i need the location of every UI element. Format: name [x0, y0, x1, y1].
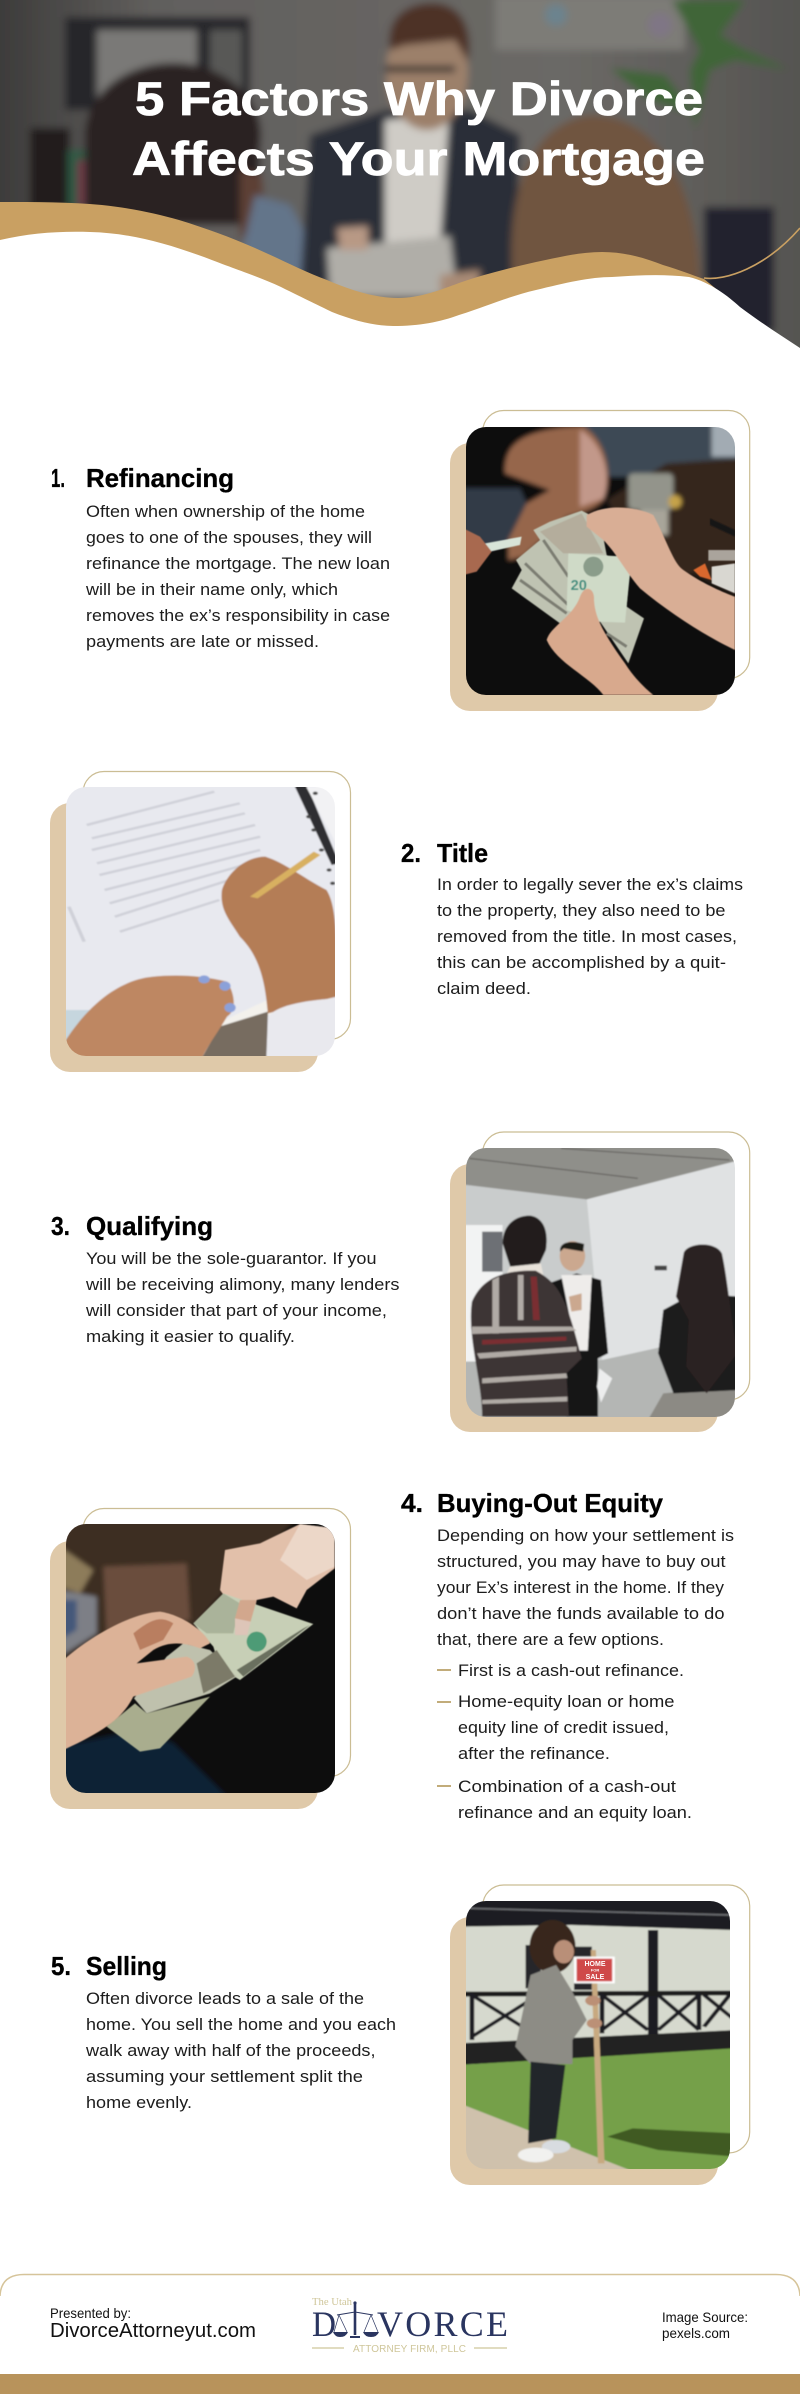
heading: 2.	[401, 838, 421, 868]
title	[132, 72, 705, 185]
bullet list: First is a cash-out refinance.	[458, 1662, 684, 1680]
footer	[0, 2274, 800, 2394]
photo: couple viewing an empty room	[459, 1143, 745, 1420]
body text: removes the ex’s responsibility in case	[86, 607, 390, 625]
photo: hands exchanging cash	[60, 1518, 343, 1802]
heading: 1.	[51, 463, 65, 493]
heading: Title	[437, 838, 488, 868]
bullet list	[437, 1662, 692, 1822]
presented by: Presented by:	[50, 2305, 131, 2321]
panel: factor 2 title	[50, 772, 743, 1072]
body text	[437, 876, 743, 998]
image source: Image Source:	[662, 2309, 748, 2325]
panel: factor 1 refinancing	[51, 410, 750, 711]
body text: don’t have the funds available to do	[437, 1605, 724, 1623]
photo: hands counting dollars	[466, 427, 735, 695]
heading: Qualifying	[86, 1211, 213, 1241]
bullet list: refinance and an equity loan.	[458, 1804, 692, 1822]
body text: claim deed.	[437, 980, 531, 998]
bullet list: Home-equity loan or home	[458, 1693, 674, 1711]
body text: structured, you may have to buy out	[437, 1553, 726, 1571]
logo: ATTORNEY FIRM, PLLC	[353, 2344, 466, 2355]
logo: VORCE	[377, 2304, 508, 2344]
body text: will consider that part of your income,	[85, 1302, 387, 1320]
body text: to the property, they also need to be	[437, 902, 726, 920]
body text: home. You sell the home and you each	[86, 2016, 396, 2034]
sign text: FOR	[591, 1968, 599, 1972]
body text: payments are late or missed.	[86, 633, 319, 651]
sign text	[584, 1961, 606, 1981]
body text	[85, 503, 390, 651]
body text: goes to one of the spouses, they will	[86, 529, 372, 547]
footer bar	[0, 2374, 800, 2394]
bullet list: equity line of credit issued,	[458, 1719, 669, 1737]
photo frame 1	[450, 410, 750, 711]
photo: hands counting dollars: 20	[571, 578, 587, 594]
body text: that, there are a few options.	[437, 1631, 664, 1649]
heading: 4.	[401, 1488, 423, 1518]
title: 5 Factors Why Divorce	[135, 72, 703, 125]
heading	[401, 838, 488, 868]
photo: signing a document	[61, 783, 342, 1060]
body text	[437, 1527, 734, 1649]
body text: In order to legally sever the ex’s claims	[437, 876, 743, 894]
panel: factor 4 buying-out equity	[50, 1488, 734, 1822]
heading	[51, 1951, 167, 1981]
title: Affects Your Mortgage	[132, 132, 705, 185]
photo frame 2	[50, 772, 350, 1072]
sign text: SALE	[586, 1974, 605, 1981]
body text: assuming your settlement split the	[86, 2068, 363, 2086]
presented by: DivorceAttorneyut.com	[50, 2320, 256, 2342]
presented by	[50, 2305, 256, 2342]
image source	[662, 2309, 748, 2341]
body text: home evenly.	[86, 2094, 192, 2112]
body text: walk away with half of the proceeds,	[85, 2042, 376, 2060]
logo: The Utah	[312, 2296, 352, 2308]
body text: will be receiving alimony, many lenders	[85, 1276, 400, 1294]
icon: scales of justice	[333, 2301, 379, 2337]
panel: factor 5 selling	[51, 1885, 750, 2185]
body text: your Ex’s interest in the home. If they	[437, 1579, 725, 1597]
heading: Refinancing	[86, 463, 234, 493]
body text: Depending on how your settlement is	[437, 1527, 734, 1545]
hero photo: meeting with mortgage adviser	[0, 0, 800, 370]
logo	[312, 2296, 508, 2355]
bullet list: Combination of a cash-out	[458, 1778, 676, 1796]
body text: making it easier to qualify.	[86, 1328, 295, 1346]
photo: woman with home for sale sign	[459, 1897, 735, 2173]
panel: factor 3 qualifying	[51, 1132, 750, 1432]
image source: pexels.com	[662, 2325, 730, 2341]
body text: Often divorce leads to a sale of the	[86, 1990, 364, 2008]
heading: Selling	[86, 1951, 167, 1981]
photo frame 3	[450, 1132, 750, 1432]
bullet list: after the refinance.	[458, 1745, 610, 1763]
photo frame 4	[50, 1508, 350, 1809]
photo frame 5	[450, 1885, 750, 2185]
wave: gold band and white edge	[0, 202, 800, 370]
heading: 3.	[51, 1211, 70, 1241]
body text: refinance the mortgage. The new loan	[86, 555, 390, 573]
body text: You will be the sole-guarantor. If you	[86, 1250, 376, 1268]
heading: Buying-Out Equity	[437, 1488, 664, 1518]
sign text: HOME	[584, 1961, 606, 1968]
body text	[85, 1250, 400, 1346]
body text: will be in their name only, which	[85, 581, 338, 599]
body text: removed from the title. In most cases,	[437, 928, 737, 946]
body text	[85, 1990, 396, 2112]
body text: this can be accomplished by a quit-	[437, 954, 726, 972]
body text: Often when ownership of the home	[86, 503, 365, 521]
heading: 5.	[51, 1951, 71, 1981]
logo: D	[312, 2304, 336, 2344]
